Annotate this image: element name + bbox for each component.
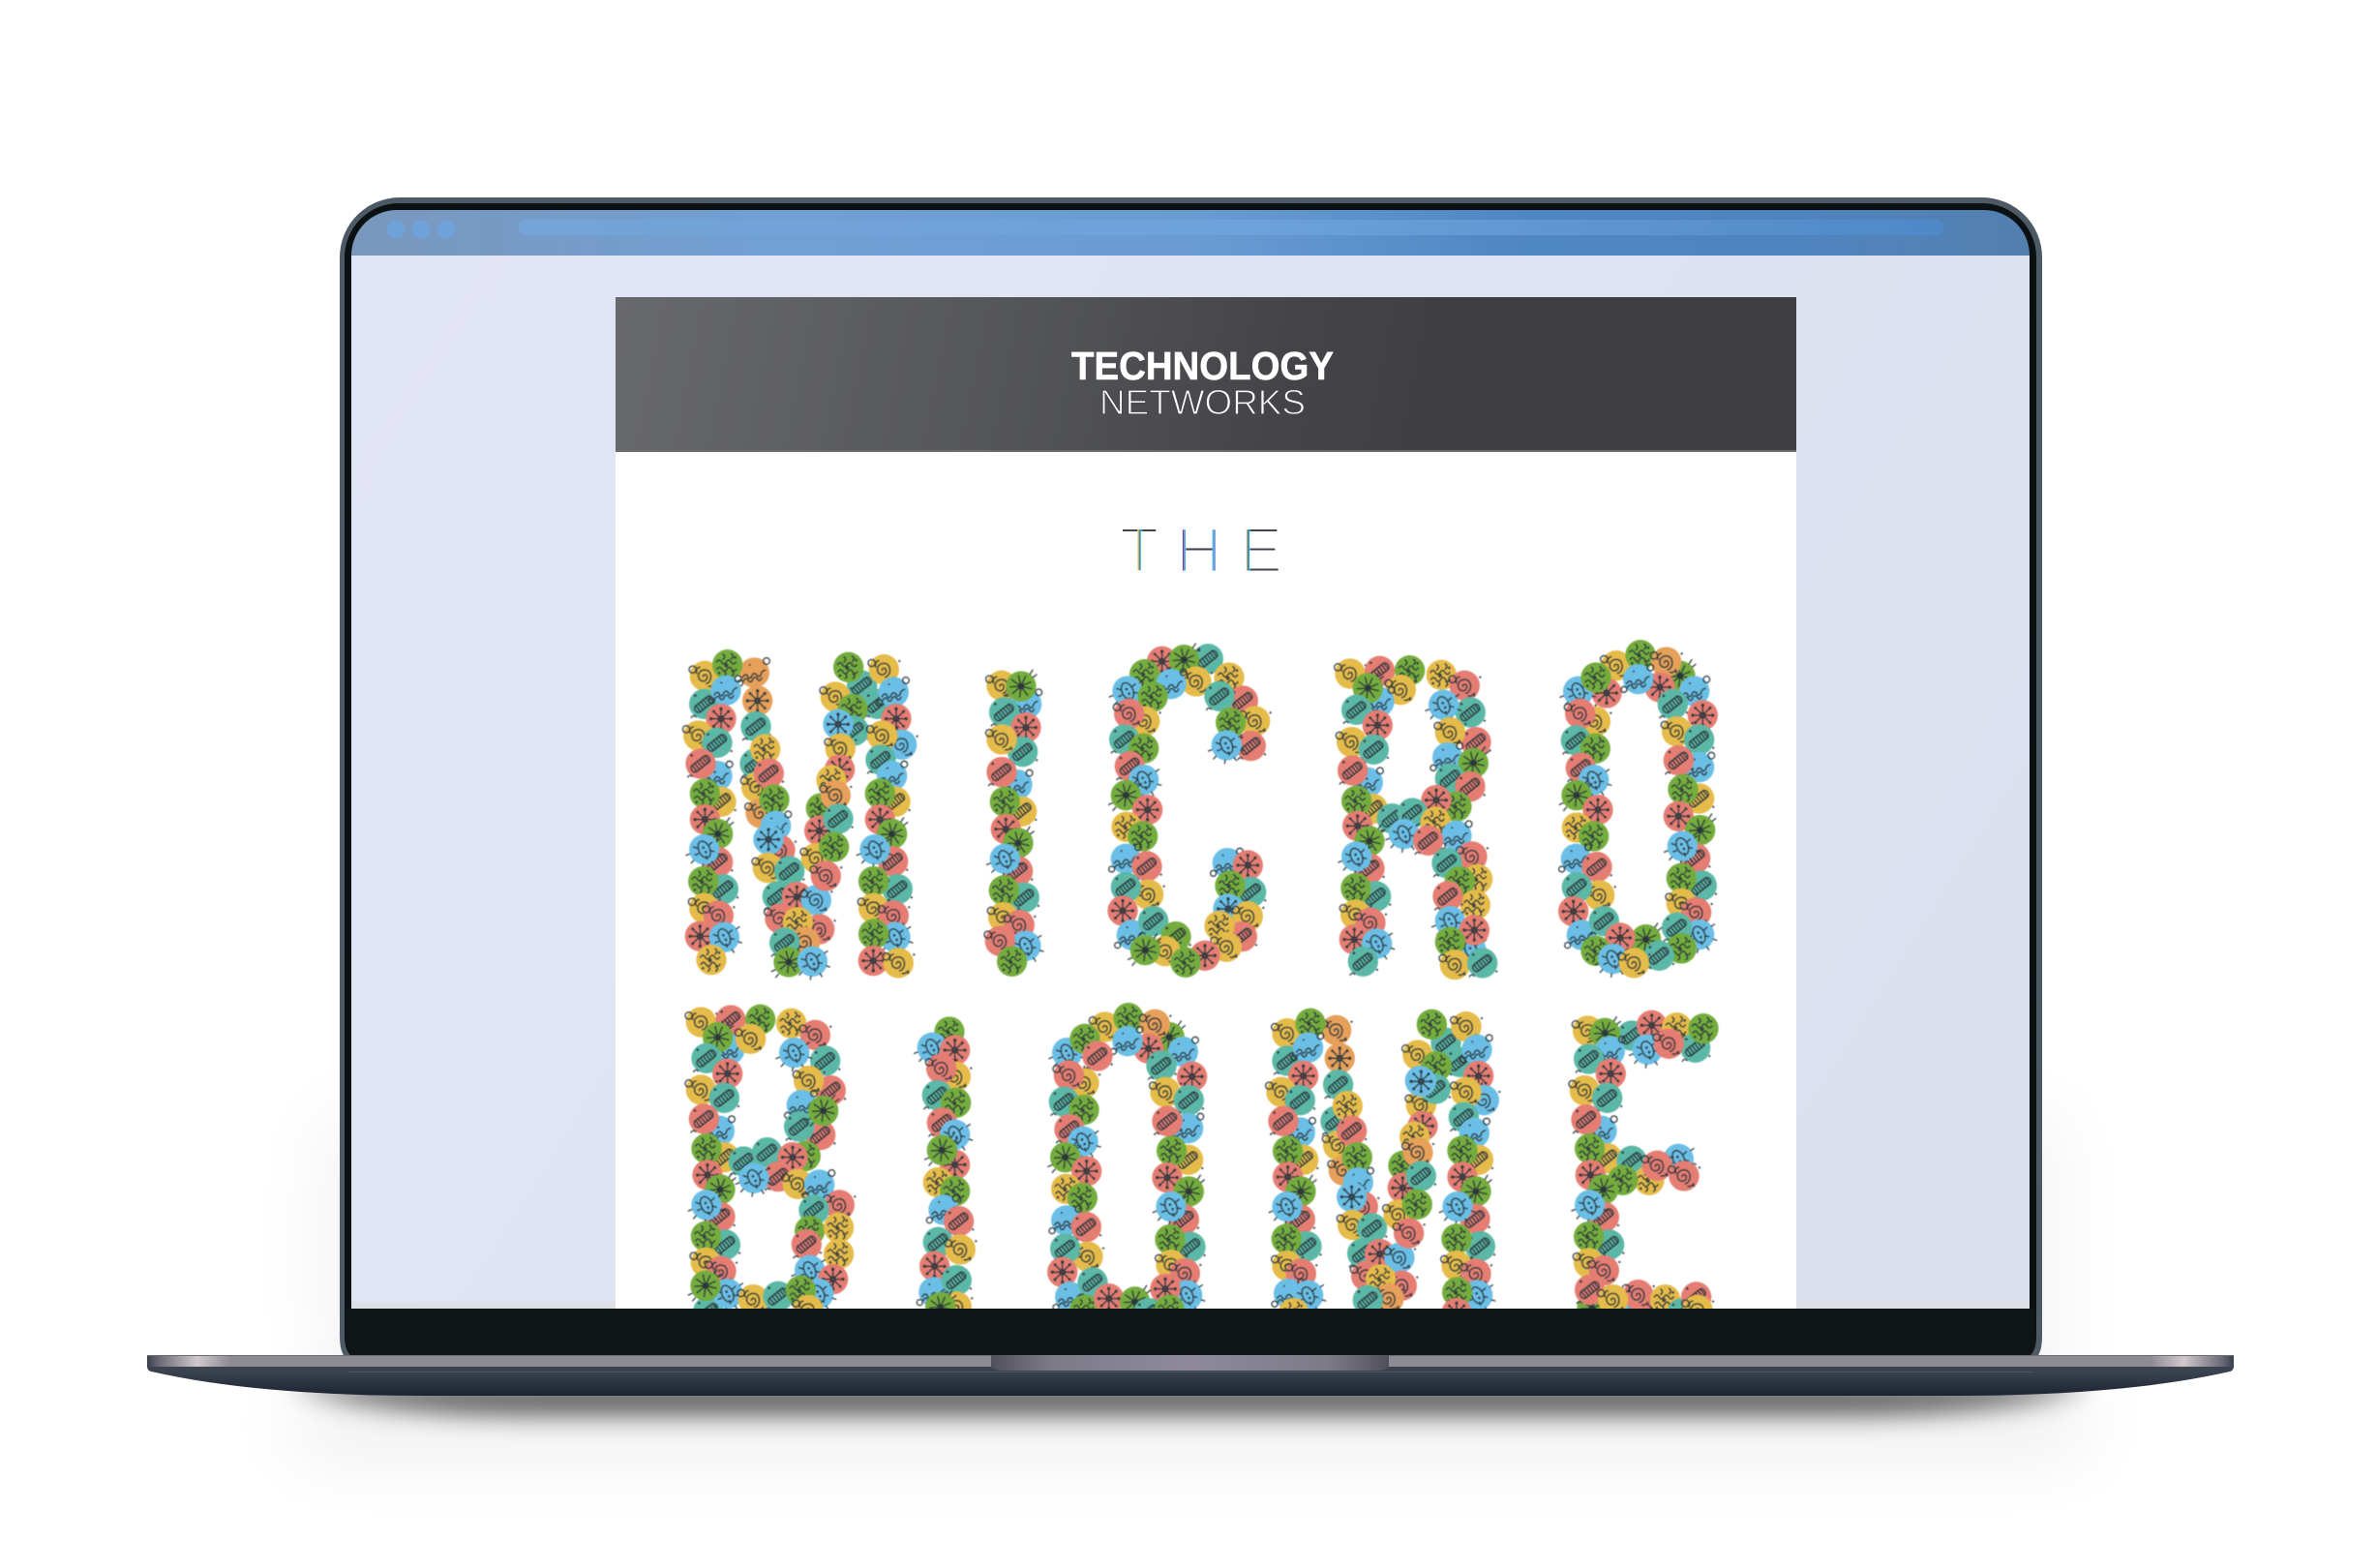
microbe lettering: micro and biome	[682, 640, 1719, 1330]
browser top bar	[351, 210, 2030, 256]
letters B and I of biome	[685, 1005, 977, 1327]
laptop base	[147, 1355, 2234, 1396]
hinge notch	[991, 1355, 1389, 1371]
logo: networks: NETWORKS	[1099, 382, 1306, 422]
logo: technology: TECHNOLOGY	[1071, 344, 1334, 388]
address bar	[519, 220, 1944, 235]
infographic page panel	[616, 297, 1796, 1309]
letter O of micro	[1558, 640, 1718, 979]
screen background	[351, 256, 2030, 1309]
letters M and I of micro	[682, 649, 1043, 980]
header band with logo	[616, 297, 1796, 452]
right stem of M and letter E of biome	[1406, 1010, 1719, 1330]
title word: the: THE	[1120, 514, 1282, 586]
letters O and M of biome	[1047, 1003, 1438, 1328]
letters C and R of micro	[1107, 644, 1497, 980]
laptop lid	[340, 197, 2042, 1355]
soft ground shadow	[290, 1113, 2091, 1452]
screen bottom bezel	[346, 1302, 2035, 1355]
window control dots	[387, 221, 455, 238]
